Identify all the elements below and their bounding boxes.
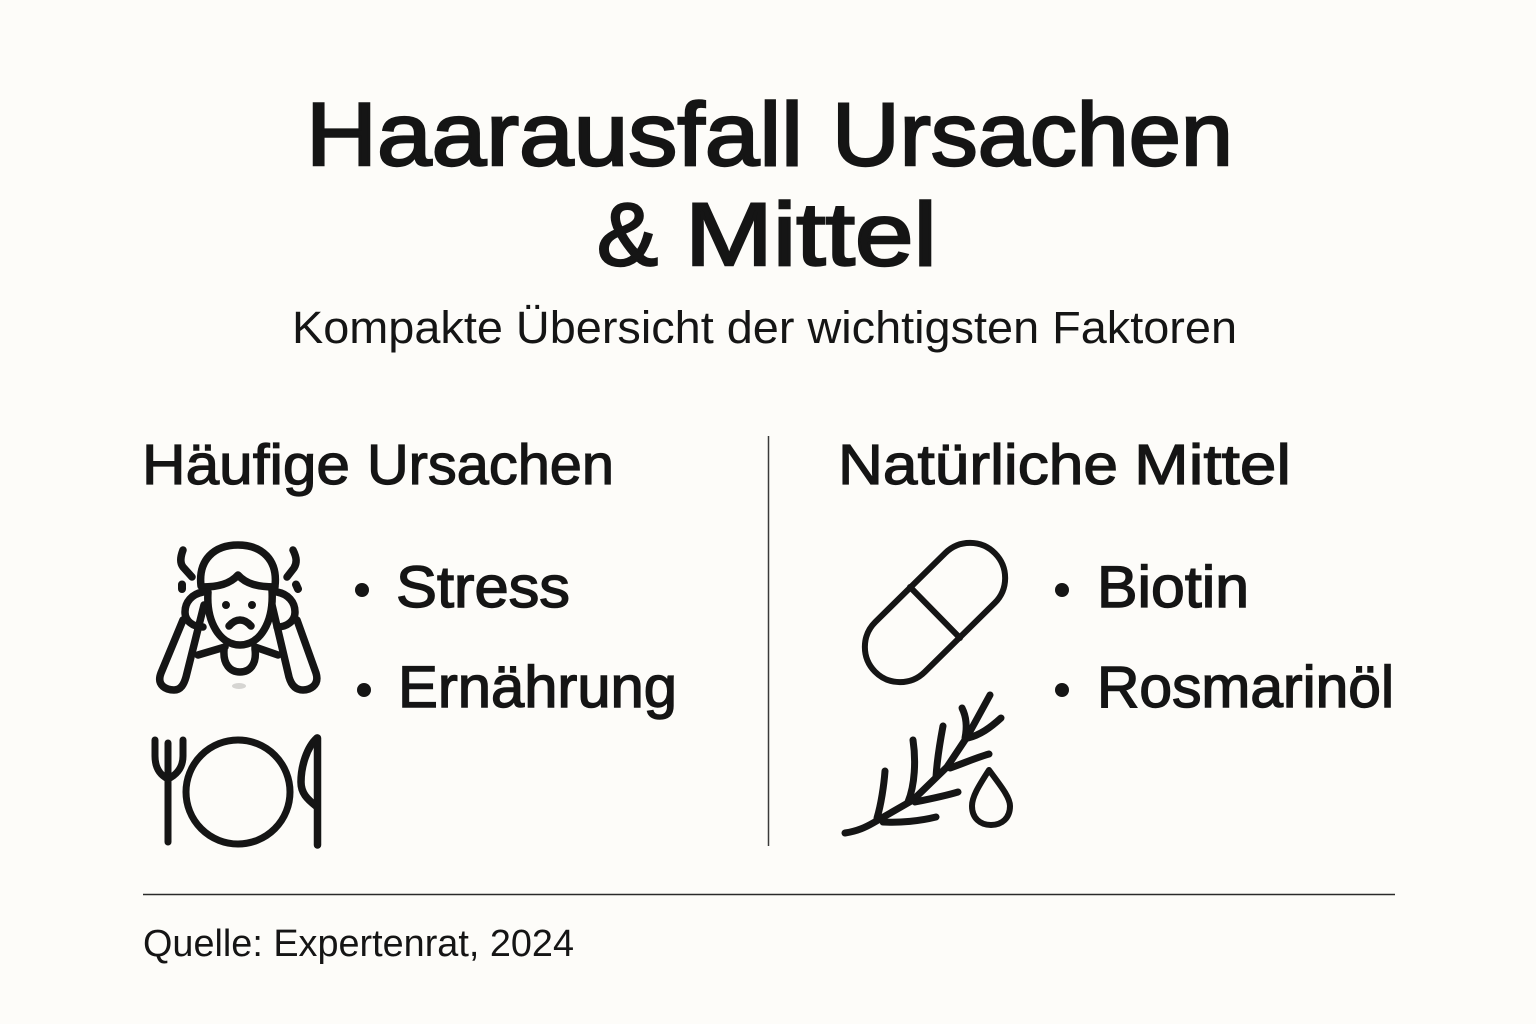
heading: remedies xyxy=(838,433,1291,497)
subtitle: Kompakte Übersicht der wichtigsten Faktoren xyxy=(292,302,1237,353)
icon: plate and cutlery xyxy=(155,738,318,845)
item: Biotin: Biotin xyxy=(1097,555,1249,620)
panel: remedies xyxy=(838,433,1394,833)
icon: capsule xyxy=(865,543,1005,682)
title xyxy=(306,84,1233,284)
panel: causes xyxy=(142,433,677,845)
smudge xyxy=(232,683,246,689)
column divider xyxy=(768,436,770,846)
icon: stressed person xyxy=(160,545,317,690)
source note: Quelle: Expertenrat, 2024 xyxy=(143,923,574,965)
bullet: Rosmarinöl xyxy=(1055,683,1069,697)
heading: causes: Ursachen xyxy=(367,433,614,497)
bullet: Biotin xyxy=(1055,583,1069,597)
bullet: Ernährung xyxy=(357,683,371,697)
heading: remedies: Mittel xyxy=(1134,433,1291,497)
heading: causes xyxy=(142,433,614,497)
item: Rosmarinöl: Rosmarinöl xyxy=(1097,655,1394,720)
icon: rosemary and oil drop xyxy=(845,695,1010,833)
footer rule xyxy=(143,894,1395,896)
heading: causes: Häufige xyxy=(142,433,350,497)
bullet: Stress xyxy=(355,583,369,597)
heading: remedies: Natürliche xyxy=(838,433,1118,497)
title: Ursachen xyxy=(832,84,1233,184)
title: & xyxy=(597,184,658,284)
title: Haarausfall xyxy=(306,84,803,184)
item: Stress: Stress xyxy=(396,555,570,620)
item: Ernährung: Ernährung xyxy=(398,655,677,720)
title: Mittel xyxy=(685,184,937,284)
